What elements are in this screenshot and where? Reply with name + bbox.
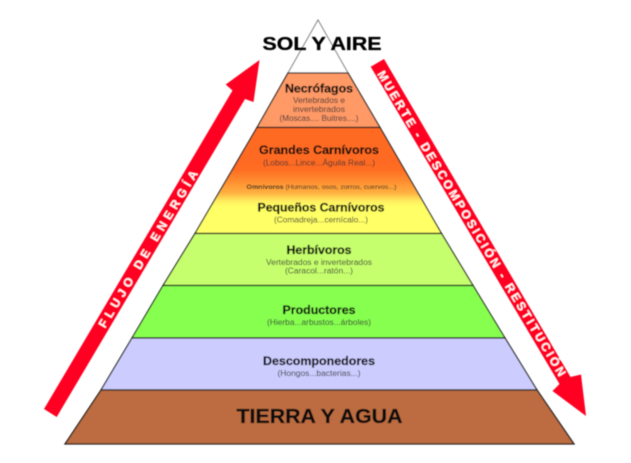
tier: necrófagos: Necrófagos: [285, 84, 353, 96]
tier: herbívoros: [163, 234, 473, 286]
tier: sol y aire apex: [288, 20, 348, 73]
arrow: flujo de energía: FLUJO DE ENERGÍA: [95, 167, 201, 330]
arrow: muerte, descomposición, restitución: MUERTE - DESCOMPOSICIÓN - RESTITUCIÓN: [374, 68, 570, 379]
tier: necrófagos: (Moscas.... Buitres....): [280, 114, 359, 123]
title: sol y aire: SOL Y AIRE: [262, 34, 382, 54]
tier: descomponedores: Descomponedores: [263, 356, 375, 368]
tier: productores: (Hierba...arbustos...árboles): [267, 318, 371, 327]
tier: herbívoros: Herbívoros: [286, 245, 352, 257]
tier: descomponedores: (Hongos...bacterias...): [278, 369, 361, 378]
tier: grandes carnívoros, omnívoros y pequeños carnívoros: [195, 128, 442, 234]
tier: grandes carnívoros, omnívoros y pequeños carnívoros: (Comadreja...cernícalo...): [274, 216, 368, 224]
tier: descomponedores: [101, 338, 537, 390]
arrow: flujo de energía: [44, 60, 260, 417]
tier: productores: Productores: [282, 305, 356, 317]
tier: grandes carnívoros, omnívoros y pequeños carnívoros: Grandes Carnívoros: [259, 145, 379, 157]
pyramid: [65, 20, 574, 444]
tier: necrófagos: [257, 73, 380, 128]
tier: grandes carnívoros, omnívoros y pequeños carnívoros: Pequeños Carnívoros: [258, 203, 384, 215]
tier: grandes carnívoros, omnívoros y pequeños carnívoros: Omnívoros (Humanos, osos, zorros, cuervos...): [246, 184, 396, 191]
tier: necrófagos: Vertebrados e: [293, 96, 345, 105]
tier: grandes carnívoros, omnívoros y pequeños carnívoros: (Lobos...Lince...Águila Real...): [263, 158, 375, 168]
tier: herbívoros: Vertebrados e invertebrados: [266, 258, 372, 267]
tier: tierra y agua: TIERRA Y AGUA: [236, 406, 402, 428]
tier: necrófagos: invertebrados: [293, 105, 345, 114]
tier: herbívoros: (Caracol...ratón...): [285, 266, 353, 276]
tier: tierra y agua: [65, 390, 574, 444]
tier: productores: [132, 286, 505, 338]
